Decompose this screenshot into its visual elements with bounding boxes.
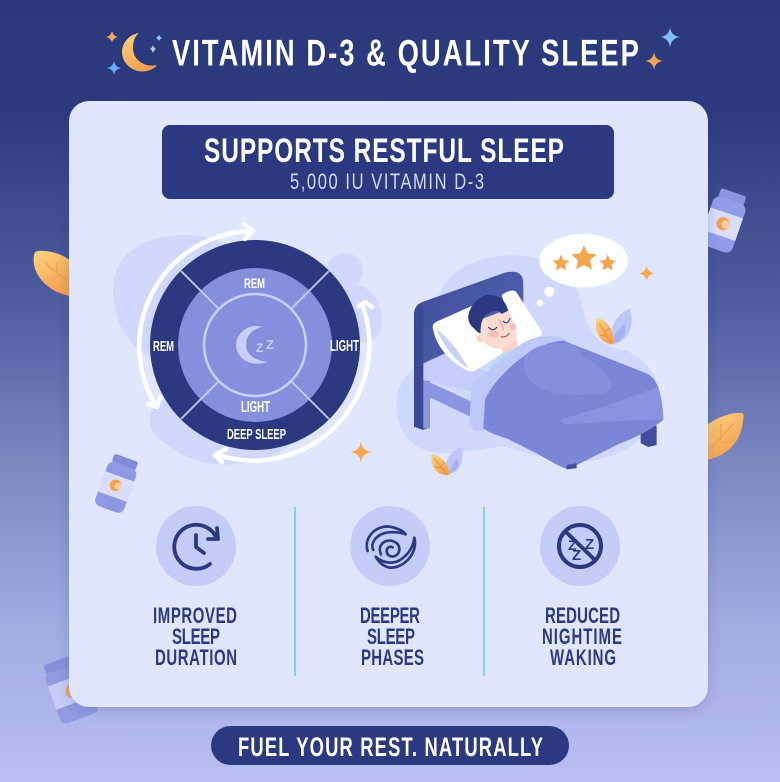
label: REDUCED — [545, 603, 620, 628]
label — [542, 603, 622, 670]
icon: spiral — [350, 506, 430, 586]
title: VITAMIN D-3 & QUALITY SLEEP — [172, 33, 639, 73]
footer text: FUEL YOUR REST. NATURALLY — [238, 731, 543, 762]
icon: small bottle in panel — [93, 453, 141, 515]
thought bubble — [537, 234, 628, 306]
icon: right bottle behind panel — [698, 187, 750, 254]
bed frame — [423, 379, 472, 428]
label: REM left: REM — [153, 338, 174, 355]
label: IMPROVED — [153, 603, 237, 628]
headboard — [414, 272, 523, 430]
banner heading: SUPPORTS RESTFUL SLEEP — [204, 132, 564, 170]
label — [153, 603, 237, 670]
arrow: left cycle arc — [139, 224, 253, 407]
icon: clock with arrow — [156, 506, 236, 586]
benefit: deeper sleep phases — [350, 506, 430, 670]
label: PHASES — [361, 645, 424, 670]
label: DURATION — [155, 645, 237, 670]
icon: crossed-out zz: Z — [572, 547, 581, 564]
bed leg — [641, 426, 657, 447]
decorative blobs behind sleep wheel — [113, 235, 382, 464]
icon: title right sparkles — [645, 27, 680, 70]
label: REM top: REM — [244, 275, 265, 291]
label: DEEPER — [360, 603, 420, 628]
chart: sleep cycle wheel — [150, 240, 360, 450]
banner subheading: 5,000 IU VITAMIN D-3 — [290, 170, 484, 195]
label: DEEP SLEEP: DEEP SLEEP — [227, 426, 286, 443]
pillows — [502, 291, 542, 346]
label: NIGHTIME — [542, 624, 622, 649]
label: LIGHT bottom: LIGHT — [241, 399, 270, 416]
divider lines — [295, 507, 484, 676]
illustration: sleeping person in bed — [397, 234, 663, 475]
icon: crossed-out zz — [540, 506, 620, 586]
label: LIGHT right: LIGHT — [330, 338, 359, 355]
rating stars — [553, 245, 616, 270]
label: SLEEP — [367, 624, 415, 649]
icon: moon with zz: Z — [266, 337, 274, 352]
label: SLEEP — [172, 624, 220, 649]
label: WAKING — [550, 645, 616, 670]
leaf bottom — [431, 447, 463, 475]
icon: bottom-left bottle behind panel — [41, 653, 100, 725]
sparkle — [639, 266, 654, 281]
icon: left leaf behind panel — [34, 251, 78, 296]
person neck and shirt — [502, 341, 518, 355]
benefit: reduced nighttime waking — [540, 506, 622, 670]
leaf right — [596, 308, 632, 344]
benefit: improved sleep duration — [153, 506, 237, 670]
mattress — [423, 353, 497, 392]
icon: crossed-out zz: Z — [585, 536, 594, 553]
icon: crossed-out zz: Z — [568, 537, 577, 553]
icon: title moon and sparkles — [106, 31, 162, 75]
blanket — [483, 341, 663, 469]
icon: moon with zz: Z — [256, 341, 263, 355]
background blob — [397, 255, 660, 462]
panel: main card — [69, 101, 708, 707]
arrow: right cycle arc — [215, 302, 372, 462]
footer pill — [211, 726, 569, 765]
icon: orange sparkle by wheel — [350, 441, 372, 463]
icon: moon with zz — [236, 326, 274, 364]
blanket fold — [469, 336, 577, 431]
banner: supports restful sleep — [162, 125, 614, 199]
icon: right leaf behind panel — [700, 413, 744, 461]
person head — [468, 295, 517, 349]
label — [360, 603, 424, 670]
